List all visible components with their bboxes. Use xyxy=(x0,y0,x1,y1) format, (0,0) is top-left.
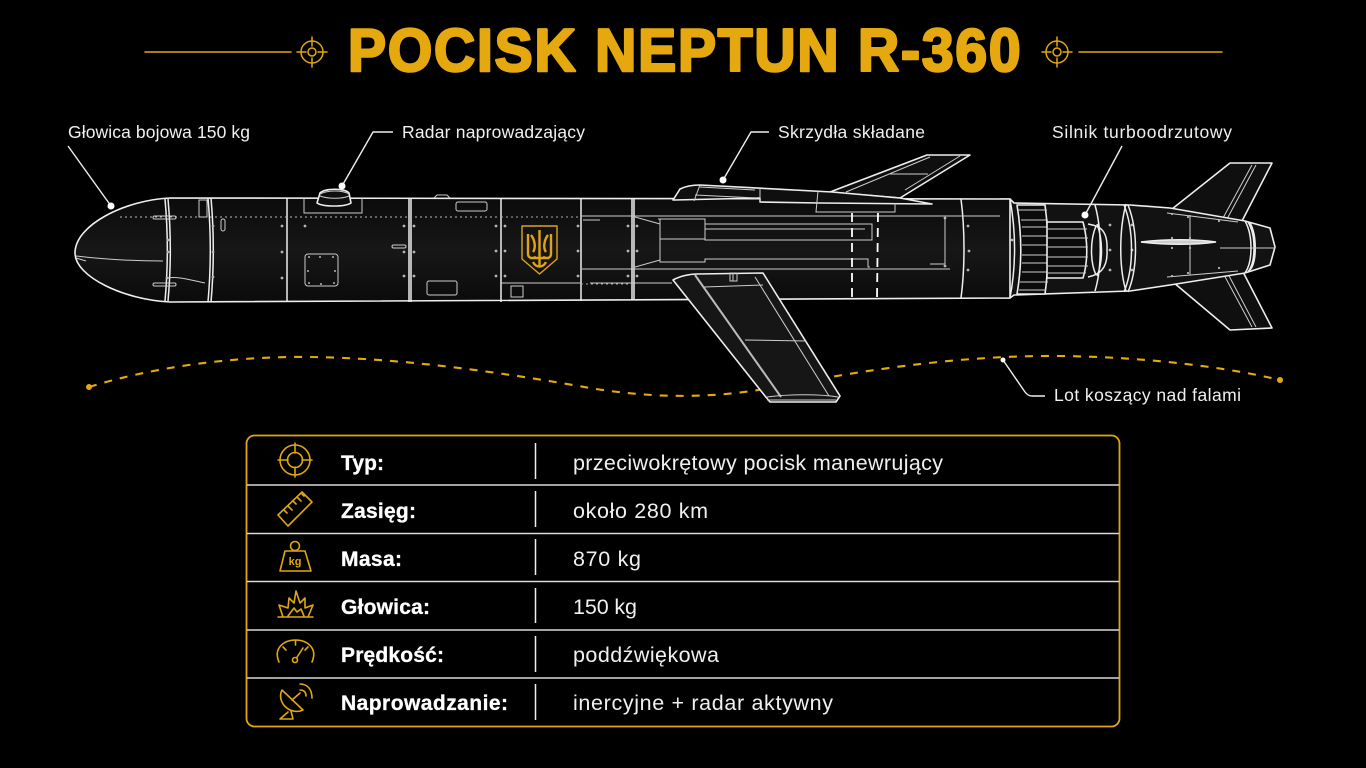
row: warhead: Głowica: xyxy=(341,596,430,619)
radar dome xyxy=(317,189,351,206)
title text: POCISK NEPTUN R-360 xyxy=(348,18,1021,84)
lower wing xyxy=(673,273,840,402)
row: warhead xyxy=(278,591,637,619)
specification table xyxy=(246,436,1120,726)
flight path xyxy=(86,356,1283,396)
callout: radar xyxy=(338,122,585,190)
callout: sea-skimming flight xyxy=(1000,358,1241,405)
engine section xyxy=(1017,204,1136,294)
left title ornament xyxy=(145,37,327,67)
row: mass xyxy=(280,542,641,571)
icon: satellite dish xyxy=(280,684,312,719)
icon: speedometer xyxy=(277,640,314,662)
rear fuselage xyxy=(1000,199,1275,298)
upper tail fin xyxy=(1167,163,1272,221)
rivets xyxy=(167,218,1132,278)
icon: explosion xyxy=(278,591,313,617)
row: mass: Masa: xyxy=(341,548,402,571)
icon: weight xyxy=(280,542,311,571)
row: type xyxy=(278,443,943,477)
hatch panels xyxy=(153,195,945,297)
row: guidance: Naprowadzanie: xyxy=(341,692,508,715)
row: range: około 280 km xyxy=(573,499,708,523)
tail section xyxy=(1141,213,1275,277)
row: guidance xyxy=(280,684,833,719)
table frame xyxy=(246,436,1120,726)
title xyxy=(145,18,1222,84)
main fuselage and nose xyxy=(75,198,1010,302)
icon: weight: kg xyxy=(289,556,301,568)
row: speed: Prędkość: xyxy=(341,644,444,667)
icon: target xyxy=(278,443,312,477)
wing root fairing xyxy=(673,185,932,212)
row: speed: poddźwiękowa xyxy=(573,643,719,667)
right title ornament xyxy=(1042,37,1222,67)
callout: wings: Skrzydła składane xyxy=(778,122,925,142)
callout: radar: Radar naprowadzający xyxy=(402,122,585,142)
callout: warhead xyxy=(68,122,250,210)
icon: ruler xyxy=(278,492,312,526)
panel seams xyxy=(76,198,1014,302)
upper wing xyxy=(830,155,970,198)
row: guidance: inercyjne + radar aktywny xyxy=(573,691,833,715)
callout: engine xyxy=(1052,122,1232,218)
row: mass: 870 kg xyxy=(573,547,641,571)
callout: warhead: Głowica bojowa 150 kg xyxy=(68,122,250,142)
callout: wings xyxy=(720,122,925,184)
missile xyxy=(75,155,1275,402)
row: warhead: 150 kg xyxy=(573,595,637,619)
row: range: Zasięg: xyxy=(341,500,416,523)
row: speed xyxy=(277,640,719,667)
trident emblem xyxy=(522,226,557,274)
row: type: Typ: xyxy=(341,452,384,475)
row: range xyxy=(278,492,708,526)
callout: sea-skimming flight: Lot koszący nad falami xyxy=(1054,385,1241,405)
row: type: przeciwokrętowy pocisk manewrujący xyxy=(573,451,943,475)
lower tail fin xyxy=(1167,270,1272,330)
callout: engine: Silnik turboodrzutowy xyxy=(1052,122,1232,142)
